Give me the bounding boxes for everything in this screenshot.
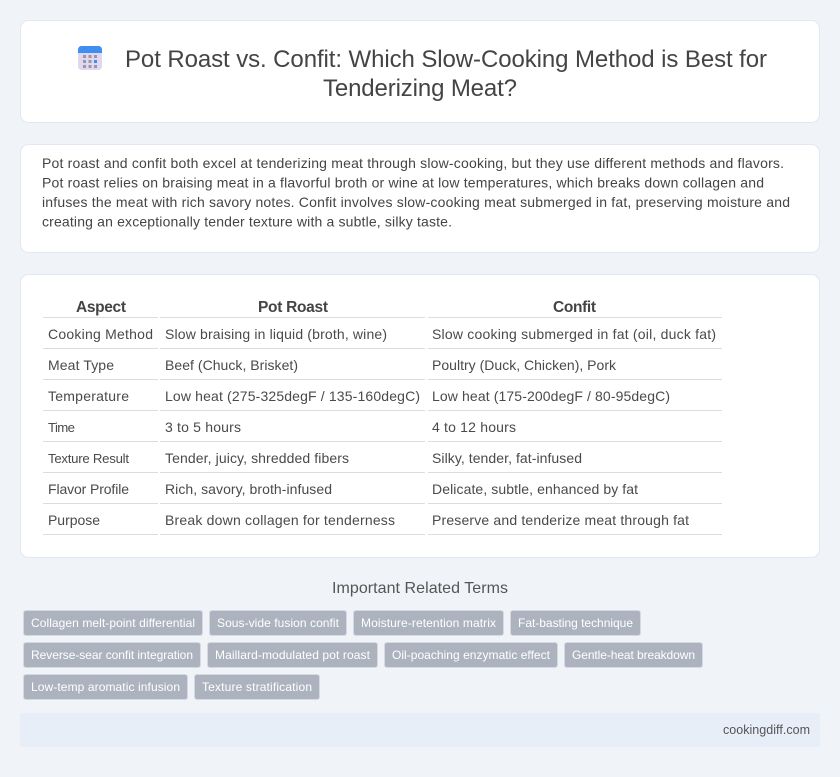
row: flavor profile: Delicate, subtle, enhanced by fat — [432, 481, 638, 497]
row: texture result — [48, 450, 582, 466]
tags: related terms: Sous-vide fusion confit — [217, 616, 340, 630]
row: flavor profile — [48, 481, 638, 497]
row: temperature: Low heat (275-325degF / 135-160degC) — [165, 388, 420, 404]
panel: comparison table — [20, 274, 820, 558]
tags: related terms: Fat-basting technique — [518, 616, 633, 630]
row: meat type — [48, 357, 617, 373]
row: meat type: Beef (Chuck, Brisket) — [165, 357, 298, 373]
row: cooking method: Slow braising in liquid (broth, wine) — [165, 326, 387, 342]
row: time: Time — [48, 420, 75, 435]
tags: related terms: Reverse-sear confit integration — [31, 648, 193, 662]
row: temperature: Temperature — [48, 388, 129, 404]
tags: related terms: Maillard-modulated pot roast — [215, 648, 371, 662]
row: cooking method — [48, 326, 716, 342]
tags: related terms: Collagen melt-point differential — [31, 616, 195, 630]
text block: introduction: creating an exceptionally tender texture with a subtle, silky taste. — [42, 214, 452, 230]
row: cooking method: Slow cooking submerged in fat (oil, duck fat) — [432, 326, 716, 342]
row: texture result: Tender, juicy, shredded fibers — [165, 450, 349, 466]
row: temperature — [48, 388, 670, 404]
panel: title header — [20, 20, 820, 122]
row: purpose: Break down collagen for tenderness — [165, 512, 395, 528]
title: Pot Roast vs. Confit: Which Slow-Cooking Method is Best for — [125, 46, 767, 73]
table header: Confit — [553, 299, 596, 316]
row: flavor profile: Rich, savory, broth-infused — [165, 481, 332, 497]
text block: introduction — [42, 155, 790, 230]
row: texture result: Silky, tender, fat-infused — [432, 450, 582, 466]
row: cooking method: Cooking Method — [48, 326, 153, 342]
panel: introduction — [20, 144, 820, 252]
text block: introduction: Pot roast and confit both excel at tenderizing meat through slow-cooking, but they use different methods and flavors. — [42, 155, 784, 171]
row: time — [48, 419, 516, 435]
tags: related terms: Texture stratification — [202, 680, 312, 694]
row: time: 4 to 12 hours — [432, 419, 516, 435]
tags: related terms: Gentle-heat breakdown — [572, 648, 695, 662]
heading: related terms: Important Related Terms — [332, 580, 508, 597]
row: purpose: Preserve and tenderize meat through fat — [432, 512, 689, 528]
text block: introduction: Pot roast relies on braising meat in a flavorful broth or wine at low temperatures, which breaks down collagen and — [42, 174, 764, 190]
row: meat type: Meat Type — [48, 357, 114, 373]
tags: related terms: Oil-poaching enzymatic effect — [392, 648, 551, 662]
tags: related terms: Moisture-retention matrix — [361, 616, 496, 630]
row: time: 3 to 5 hours — [165, 419, 241, 435]
tags: related terms — [24, 610, 702, 700]
table header: Pot Roast — [258, 299, 328, 316]
title — [125, 46, 767, 102]
row: purpose — [48, 512, 689, 528]
tags: related terms: Low-temp aromatic infusion — [31, 680, 180, 694]
row: purpose: Purpose — [48, 512, 100, 528]
icon: calendar — [78, 46, 102, 70]
row: temperature: Low heat (175-200degF / 80-95degC) — [432, 388, 670, 404]
row: flavor profile: Flavor Profile — [48, 481, 129, 497]
footer — [20, 713, 820, 747]
table header: Aspect — [76, 299, 126, 316]
table header — [76, 299, 596, 316]
text block: introduction: infuses the meat with rich savory notes. Confit involves slow-cooking meat submerged in fat, preserving moisture and — [42, 194, 790, 210]
title: Tenderizing Meat? — [323, 75, 517, 102]
footer: cookingdiff.com — [723, 723, 810, 737]
row: texture result: Texture Result — [48, 451, 129, 466]
row: meat type: Poultry (Duck, Chicken), Pork — [432, 357, 617, 373]
